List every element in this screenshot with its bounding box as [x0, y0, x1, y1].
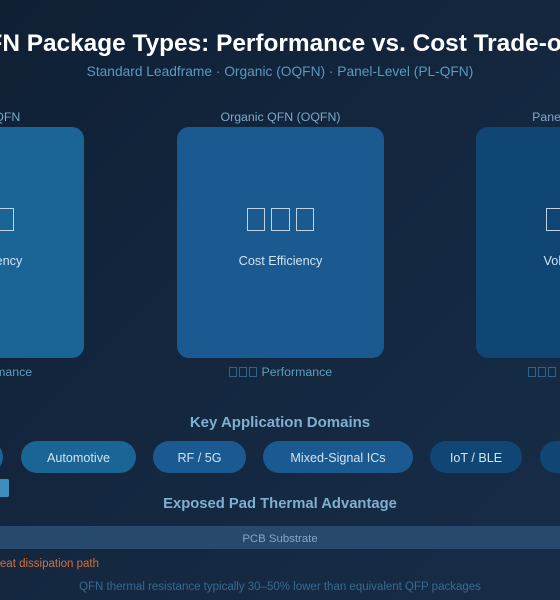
- rating: organic performance: [229, 365, 332, 379]
- icon: missing glyph boxes: [0, 208, 14, 231]
- heading: thermal advantage: Exposed Pad Thermal Advantage: [163, 496, 397, 512]
- panel: organic QFN card: [177, 127, 384, 358]
- pill: RF / 5G: RF / 5G: [177, 451, 222, 465]
- subtitle: Standard Leadframe · Organic (OQFN) · Panel-Level (PL-QFN): [87, 64, 473, 79]
- icon: missing glyph boxes: [247, 208, 314, 231]
- PCB substrate bar: [0, 526, 560, 549]
- rating: panel-level performance: [528, 367, 556, 377]
- pill: consumer: [0, 441, 3, 473]
- heading: application domains: Key Application Domains: [190, 414, 370, 431]
- pill: mixed-signal ICs: [263, 441, 413, 473]
- pill: RF / 5G: [153, 441, 246, 473]
- panel: standard QFN card: [0, 127, 84, 358]
- rating: organic performance: Performance: [262, 365, 332, 379]
- card caption: Cost Efficiency: [239, 254, 322, 268]
- pill: automotive: Automotive: [47, 451, 110, 465]
- pill: mixed-signal ICs: Mixed-Signal ICs: [290, 451, 386, 465]
- pill: power: [540, 441, 560, 473]
- label: organic QFN: Organic QFN (OQFN): [220, 110, 340, 124]
- pill: IoT / BLE: IoT / BLE: [450, 451, 502, 465]
- PCB substrate bar: PCB Substrate: [242, 533, 318, 545]
- pill: IoT / BLE: [430, 441, 522, 473]
- footnote: QFN thermal resistance typically 30–50% lower than equivalent QFP packages: [79, 581, 481, 593]
- panel: panel-level QFN card: [476, 127, 560, 358]
- thermal die block: [0, 479, 9, 497]
- icon: missing glyph boxes: [546, 208, 560, 231]
- pill: automotive: [21, 441, 136, 473]
